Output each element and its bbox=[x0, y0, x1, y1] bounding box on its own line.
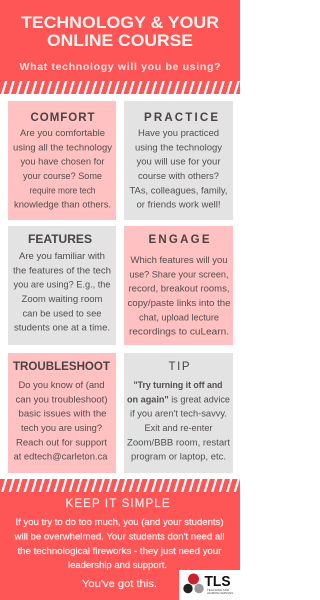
panel: features: students one at a time. bbox=[14, 323, 110, 333]
panel: tip: on again" is great advice bbox=[127, 394, 230, 404]
footer band bbox=[0, 479, 240, 600]
panel: comfort: knowledge than others. bbox=[14, 200, 111, 210]
panel: tip: program or laptop, etc. bbox=[131, 452, 226, 462]
title bbox=[21, 14, 219, 50]
panel: practice: you will use for your bbox=[136, 157, 220, 167]
panel: tip: TIP bbox=[168, 361, 190, 373]
panel: comfort: COMFORT bbox=[30, 112, 94, 124]
panel: troubleshoot: TROUBLESHOOT bbox=[13, 361, 110, 373]
panel: troubleshoot: at edtech@carleton.ca bbox=[14, 452, 108, 462]
logo: TLS: TLS bbox=[204, 574, 231, 590]
heading: keep it simple: KEEP IT SIMPLE bbox=[66, 498, 170, 510]
panel: troubleshoot: Reach out for support bbox=[16, 437, 107, 447]
panel: practice: using the technology bbox=[135, 142, 222, 152]
panel: comfort: your course? Some bbox=[23, 171, 102, 181]
panel: engage bbox=[124, 226, 233, 345]
panel: features bbox=[8, 226, 116, 345]
footer text: leadership and support. bbox=[68, 560, 167, 570]
panel: engage: use? Share your screen, bbox=[130, 269, 228, 279]
panel: features: the features of the tech bbox=[13, 265, 111, 275]
panel: features: FEATURES bbox=[28, 234, 92, 246]
title: TECHNOLOGY & YOUR bbox=[21, 14, 219, 32]
footer text: the technological fireworks - they just need your bbox=[18, 546, 222, 556]
header band bbox=[0, 0, 240, 94]
panel: practice: TAs, colleagues, family, bbox=[130, 185, 228, 195]
panel: features: can be used to see bbox=[22, 308, 102, 318]
panel: tip: Zoom/BBB room, restart bbox=[127, 437, 230, 447]
panel: tip: "Try turning it off and bbox=[134, 380, 222, 390]
panel: features: Zoom waiting room bbox=[22, 294, 103, 304]
panel: practice: or friends work well! bbox=[136, 200, 220, 210]
panel: features: Are you familiar with bbox=[19, 251, 105, 261]
panel: troubleshoot: Do you know of (and bbox=[18, 380, 104, 390]
panel: comfort: you have chosen for bbox=[20, 157, 104, 167]
panel: practice bbox=[124, 101, 233, 220]
panel: comfort: using all the technology bbox=[13, 142, 112, 152]
title: ONLINE COURSE bbox=[47, 32, 193, 50]
panel: tip: if you aren't tech-savvy. bbox=[130, 409, 227, 419]
panel: tip: Exit and re-enter bbox=[144, 423, 212, 433]
panel: comfort: require more tech bbox=[30, 185, 96, 195]
panel: troubleshoot: can you troubleshoot) bbox=[16, 394, 107, 404]
panel: troubleshoot bbox=[8, 353, 116, 473]
footer text: will be overwhelmed. Your students don't need all bbox=[13, 532, 225, 542]
panel: engage: Which features will you bbox=[130, 255, 228, 265]
panel: engage: copy/paste links into the bbox=[128, 298, 230, 308]
panel: troubleshoot: basic issues with the bbox=[18, 409, 106, 419]
panel: engage: record, breakout rooms, bbox=[128, 284, 230, 294]
panel: engage: chat, upload lecture bbox=[139, 312, 219, 322]
panel: comfort: Are you comfortable bbox=[20, 128, 105, 138]
subtitle: What technology will you be using? bbox=[20, 61, 220, 73]
panel: practice: PRACTICE bbox=[144, 112, 218, 124]
footer text: If you try to do too much, you (and your students) bbox=[16, 517, 224, 527]
panel: practice: Have you practiced bbox=[138, 128, 219, 138]
panel: troubleshoot: tech you are using? bbox=[21, 423, 102, 433]
footer text bbox=[13, 517, 225, 570]
logo: TLS bbox=[179, 570, 240, 600]
panel: tip bbox=[124, 353, 233, 473]
logo: TLS: TEACHING AND bbox=[207, 588, 229, 592]
panel: engage: recordings to cuLearn. bbox=[129, 327, 229, 337]
logo: TLS: LEARNING SERVICES bbox=[207, 591, 233, 595]
icon: speech bubbles bbox=[183, 574, 204, 593]
panel: engage: ENGAGE bbox=[148, 234, 210, 246]
closing line: You've got this. bbox=[82, 578, 157, 590]
panel: practice: course with others? bbox=[138, 171, 219, 181]
panel: comfort bbox=[8, 101, 116, 220]
panel: features: you are using? E.g., the bbox=[14, 280, 110, 290]
